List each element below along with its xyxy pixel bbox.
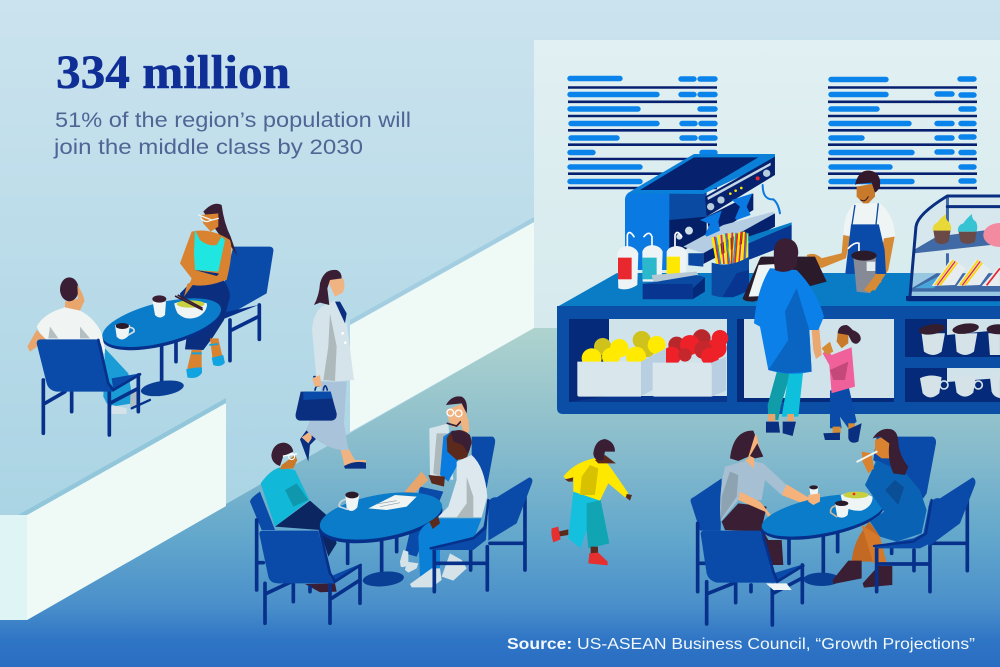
table [758, 486, 887, 586]
bag [296, 375, 337, 421]
yellow fruit [582, 331, 666, 368]
steam wand [763, 185, 780, 213]
table [97, 288, 226, 399]
chair back [176, 247, 273, 362]
front right chair [873, 477, 975, 592]
running child [551, 439, 632, 565]
napkin box [643, 272, 705, 299]
red fruit [662, 329, 728, 366]
box two [653, 357, 726, 397]
child legs [830, 385, 857, 428]
counter [557, 273, 1000, 414]
coffee cups on shelf [918, 322, 1000, 398]
coat [754, 268, 824, 374]
glass [808, 485, 820, 505]
subtitle: 51% of the region’s population will [55, 109, 411, 132]
shelf top [915, 228, 1000, 253]
case frame [910, 196, 1000, 297]
cup [339, 492, 359, 511]
cup [831, 501, 849, 518]
donut [983, 223, 1000, 247]
child shirt [823, 347, 855, 393]
child [822, 325, 862, 443]
front left chair [701, 531, 804, 625]
pastry case [906, 196, 1000, 301]
head [595, 455, 616, 463]
head [327, 278, 345, 297]
customer woman [754, 238, 824, 436]
opening three: mugs [905, 319, 1000, 402]
opening two [737, 319, 894, 402]
partition wall: upper [350, 217, 534, 432]
lower left table scene [250, 396, 532, 623]
menu board right [828, 79, 977, 188]
legs [300, 430, 320, 462]
side box [748, 222, 792, 260]
cup [115, 323, 134, 339]
counter top [557, 273, 1000, 308]
back chair of left man [250, 492, 275, 530]
woman in tank [180, 204, 237, 377]
back chair behind woman [873, 437, 936, 498]
title: 334 million [56, 46, 290, 99]
bottle red [617, 233, 638, 289]
straws cup [712, 232, 749, 297]
source line: Source: US-ASEAN Business Council, “Growth Projections” [507, 636, 975, 653]
man with glasses [400, 396, 469, 573]
man [720, 431, 812, 565]
right table scene [691, 429, 975, 625]
menu board left [568, 78, 717, 188]
subtitle: join the middle class by 2030 [53, 136, 363, 159]
man in white tee [27, 277, 150, 414]
skirt [306, 382, 348, 450]
opening one [569, 319, 727, 402]
woman [833, 429, 927, 588]
sandwiches [932, 258, 1000, 286]
drip tray [683, 212, 775, 267]
cupcake teal [958, 214, 977, 244]
apron [846, 203, 885, 273]
arm [812, 328, 822, 359]
arm right [863, 237, 895, 291]
feet [551, 527, 608, 565]
tablet [743, 257, 827, 302]
bowl [841, 492, 873, 511]
floor [0, 328, 1000, 667]
jug [853, 252, 876, 293]
legs [766, 370, 803, 436]
chair behind [472, 437, 495, 488]
bottle teal [642, 233, 663, 282]
pants [568, 492, 609, 548]
back wall [534, 40, 1000, 332]
cupcake yellow [933, 214, 951, 244]
machine body [625, 192, 672, 270]
shirt [843, 203, 895, 273]
base shelf [912, 273, 1000, 292]
head [857, 183, 875, 203]
counter front [557, 306, 1000, 414]
paper [368, 495, 417, 510]
machine top [627, 154, 775, 194]
box one [577, 348, 666, 397]
upper table scene [27, 204, 273, 435]
partition wall: lower [0, 398, 226, 620]
fruit boxes [577, 329, 728, 397]
walking woman [296, 270, 366, 469]
coffee machine [625, 154, 792, 270]
barista [807, 171, 895, 293]
glass interior [911, 197, 1000, 297]
arm left [807, 235, 851, 268]
under-panel body [707, 193, 753, 237]
takeaway cup [152, 295, 166, 317]
front chair [37, 339, 140, 435]
coat [312, 300, 354, 382]
front right chair [430, 477, 532, 592]
control panel [705, 157, 775, 217]
man in grey sweater [410, 430, 487, 587]
front left chair [259, 531, 361, 623]
condiments [617, 232, 749, 299]
bowl with chopsticks [174, 295, 207, 319]
back chair behind man [691, 478, 751, 592]
child head [837, 333, 848, 348]
man in cyan [261, 443, 337, 592]
sweater [563, 458, 628, 501]
hair [774, 238, 798, 272]
table [316, 484, 446, 588]
spouts [700, 211, 722, 237]
bottle yellow [667, 233, 687, 277]
